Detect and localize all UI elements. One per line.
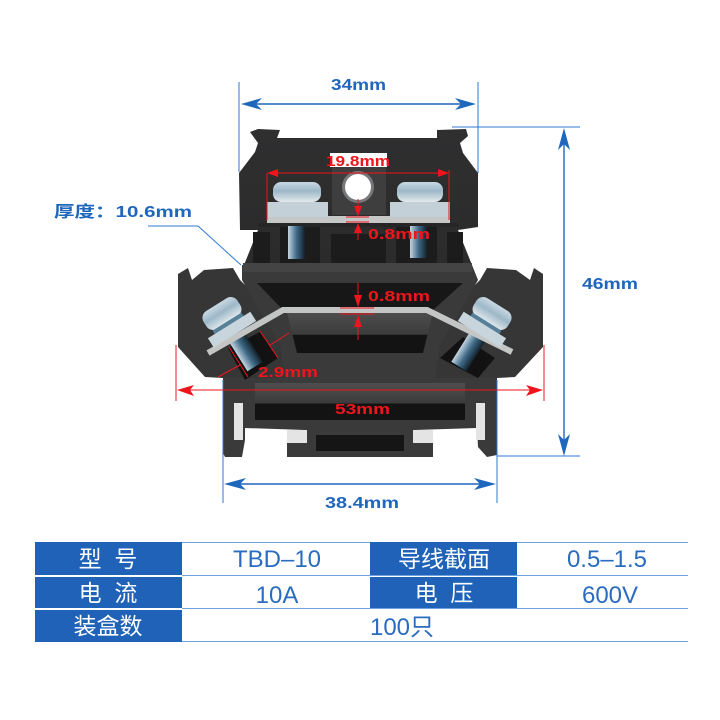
53mm measure: 53mm: [335, 401, 390, 418]
top right screw: [390, 182, 450, 217]
row 3: [74, 613, 434, 641]
lower base: [223, 378, 497, 457]
row 2: 电 压: [415, 580, 473, 606]
row 1: [79, 546, 647, 573]
lower left thread: [228, 331, 263, 371]
centre nut with hole: [332, 153, 386, 215]
rail slots: [234, 403, 485, 443]
blue dimension: 38.4mm: [224, 478, 496, 512]
specification table: [35, 542, 688, 642]
53mm measure: [176, 345, 544, 418]
0.8mm top measure: 0.8mm: [368, 226, 430, 243]
0.8mm centre measure: 0.8mm: [368, 288, 430, 305]
right screw: [458, 291, 519, 348]
centre body: [242, 265, 478, 380]
lower cavity: [257, 283, 463, 310]
row 1: 导线截面: [398, 546, 490, 572]
top metal strip: [267, 216, 450, 223]
label 38.4mm: 38.4mm: [325, 495, 399, 512]
2.9mm measure: [218, 331, 318, 381]
red dimensions: [176, 153, 544, 418]
lower right thread: [451, 331, 486, 371]
row 2: 10A: [256, 582, 298, 609]
row 1: TBD–10: [233, 546, 321, 573]
top right thread: [410, 226, 427, 258]
19.8mm measure: 19.8mm: [326, 153, 390, 170]
row 1: 0.5–1.5: [567, 546, 647, 573]
label: thickness: 厚度：10.6mm: [54, 202, 192, 221]
left screw: [195, 291, 256, 348]
row 2: 电 流: [79, 580, 137, 606]
row 3: 100只: [370, 614, 434, 641]
2.9mm measure: 2.9mm: [258, 364, 318, 381]
right wing: [420, 268, 543, 390]
left wing: [178, 268, 300, 390]
0.8mm top measure: [346, 199, 430, 243]
table rules: [182, 542, 688, 642]
blue dimension: 34mm: [148, 77, 580, 503]
upper body: [239, 129, 478, 265]
connector photo: [178, 129, 543, 457]
row 1: 型 号: [79, 546, 137, 572]
blue dimension: 46mm: [558, 128, 638, 456]
label 34mm: 34mm: [331, 77, 386, 94]
row 3: 装盒数: [74, 613, 142, 639]
label 46mm: 46mm: [582, 276, 638, 293]
top left thread: [288, 226, 305, 259]
upper cavities: [253, 225, 463, 263]
lower right cavity: [440, 337, 495, 378]
metal bridge strip: [208, 310, 512, 353]
19.8mm measure: [267, 153, 449, 220]
row 2: 600V: [582, 582, 638, 609]
row 2: [79, 580, 638, 609]
0.8mm centre measure: [340, 283, 430, 340]
header cells: [35, 542, 517, 642]
top left screw: [267, 182, 328, 217]
lower left cavity: [228, 332, 278, 380]
